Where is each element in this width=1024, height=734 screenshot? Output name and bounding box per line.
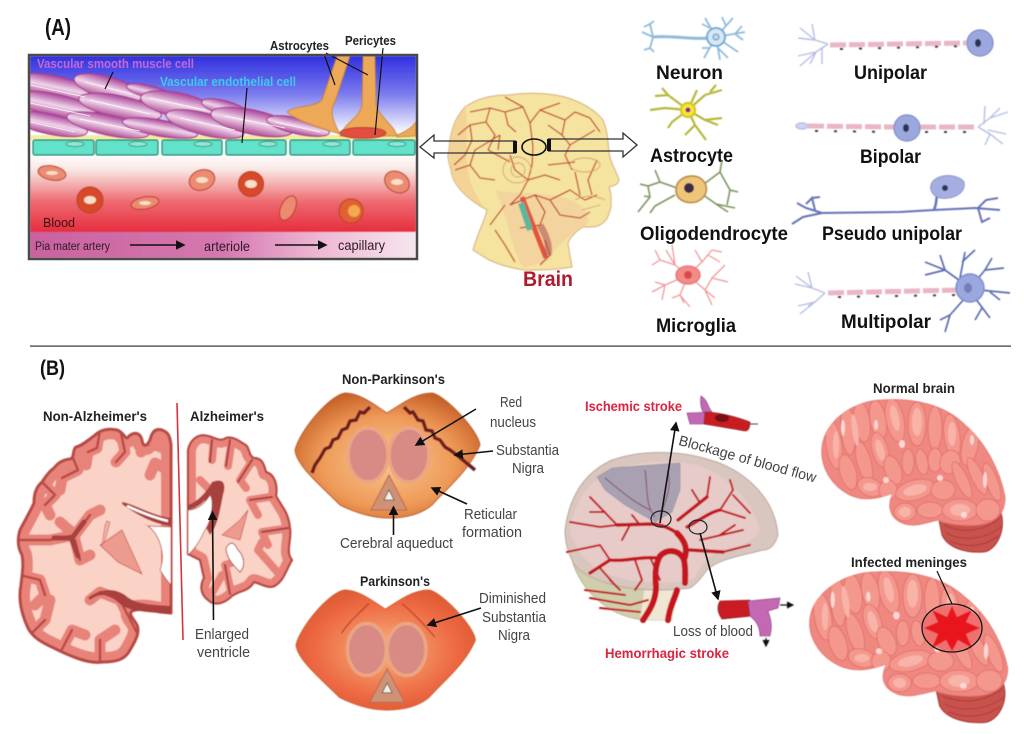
vessel type: capillary: capillary: [338, 237, 385, 253]
non-Parkinson's title: Non-Parkinson's: [342, 371, 445, 387]
arrow: to ischemic stroke: [660, 423, 676, 523]
icon: blocked vessel: [687, 396, 758, 431]
icon: unipolar neuron: [798, 24, 993, 66]
separator: red line: [177, 403, 183, 640]
magnified region ellipse: [522, 139, 546, 155]
icon: astrocyte: [650, 85, 722, 140]
arrow: infected meninges: [937, 571, 952, 604]
nigra label line: Nigra: [498, 628, 531, 644]
panel label: B: (B): [40, 357, 65, 380]
multipolar label: Multipolar: [841, 311, 931, 333]
normal brain title: Normal brain: [873, 380, 955, 396]
icon: neuron: [642, 17, 745, 60]
Alzheimer's brain section: [188, 435, 292, 603]
icon: microglia: [652, 245, 728, 307]
oligodendrocyte label: Oligodendrocyte: [640, 223, 788, 245]
vascular endothelial cell label: Vascular endothelial cell: [160, 74, 296, 89]
infected meninges title: Infected meninges: [851, 554, 967, 570]
enlarged ventricle label: Enlarged: [195, 627, 249, 643]
panel border: [29, 55, 417, 259]
pseudo unipolar label: Pseudo unipolar: [822, 223, 962, 245]
diminished label: Diminished: [479, 591, 546, 607]
blood label: Blood: [43, 215, 75, 230]
vessel background: [30, 56, 416, 258]
vascular smooth muscle cells: [30, 72, 331, 140]
icon: oligodendrocyte: [638, 160, 738, 213]
icon: multipolar neuron: [795, 250, 1010, 332]
astrocytes label: Astrocytes: [270, 39, 329, 53]
nucleus label line: nucleus: [490, 415, 536, 431]
hemorrhagic site ellipse: [689, 520, 707, 534]
arrow: substantia nigra: [455, 451, 493, 455]
panel: blood vessel wall diagram: [11, 48, 417, 259]
brain label: Brain: [523, 268, 573, 291]
icon: bipolar neuron: [796, 106, 1008, 145]
divider between panels: [30, 346, 1011, 347]
red nucleus label: Red: [500, 395, 522, 411]
loss of blood label: Loss of blood: [673, 624, 753, 640]
icon: ruptured vessel: [718, 598, 793, 646]
ischemic stroke label: Ischemic stroke: [585, 398, 682, 414]
formation label line: formation: [462, 525, 522, 541]
infection site: [923, 605, 981, 651]
vascular endothelial cells: [33, 140, 415, 155]
double arrow: brain to cell types: [548, 133, 637, 157]
astrocyte label: Astrocyte: [650, 145, 733, 167]
normal brain illustration: [822, 397, 1005, 552]
reticular label: Reticular: [464, 507, 517, 523]
leader lines: [105, 48, 383, 143]
neuron label: Neuron: [656, 62, 723, 84]
non-Alzheimer's title: Non-Alzheimer's: [43, 408, 147, 424]
vessel type: pia mater artery: Pia mater artery: [35, 241, 110, 253]
panel label: A: (A): [45, 14, 71, 40]
vessel type: arteriole: arteriole: [204, 238, 250, 254]
bipolar label: Bipolar: [860, 146, 921, 168]
arrow: diminished substantia nigra: [428, 608, 481, 625]
vascular smooth muscle cell label: Vascular smooth muscle cell: [37, 56, 194, 71]
non-Alzheimer's brain section: [18, 428, 171, 662]
ventricle label line: ventricle: [197, 645, 250, 661]
astrocyte end feet: [287, 56, 416, 137]
double arrow: brain to vessel detail: [420, 135, 516, 158]
arrow: enlarged ventricle: [212, 512, 214, 620]
substantia label: Substantia: [496, 443, 560, 459]
blockage of blood flow label: Blockage of blood flow: [677, 433, 818, 487]
Parkinson's title: Parkinson's: [360, 573, 430, 589]
hemorrhagic stroke label: Hemorrhagic stroke: [605, 645, 729, 661]
nigra label line: Nigra: [512, 461, 545, 477]
substantia label line: Substantia: [482, 610, 547, 626]
stroke brain with arteries: [565, 452, 778, 620]
pericytes label: Pericytes: [345, 34, 396, 48]
arrow: cerebral aqueduct: [392, 507, 394, 535]
ischemic site ellipse: [651, 511, 671, 527]
cerebral aqueduct label: Cerebral aqueduct: [340, 536, 453, 552]
head with cerebral vasculature: [448, 93, 619, 270]
icon: pseudo unipolar neuron: [792, 176, 1000, 224]
pericyte: [340, 128, 386, 138]
arrow end bars: [515, 139, 549, 153]
arrow: to hemorrhagic stroke: [700, 533, 718, 599]
midbrain: non-Parkinson's: [295, 393, 480, 518]
red blood cells: [37, 164, 413, 223]
arrow: reticular formation: [432, 488, 467, 504]
infection circle: [922, 604, 982, 652]
microglia label: Microglia: [656, 315, 736, 337]
infected brain illustration: [810, 569, 1008, 723]
arrow: red nucleus: [416, 409, 476, 445]
unipolar label: Unipolar: [854, 62, 927, 84]
arrow: arteriole to capillary: [275, 244, 326, 246]
midbrain: Parkinson's: [296, 590, 475, 710]
Alzheimer's title: Alzheimer's: [190, 408, 264, 424]
arrow: artery to arteriole: [130, 244, 184, 246]
